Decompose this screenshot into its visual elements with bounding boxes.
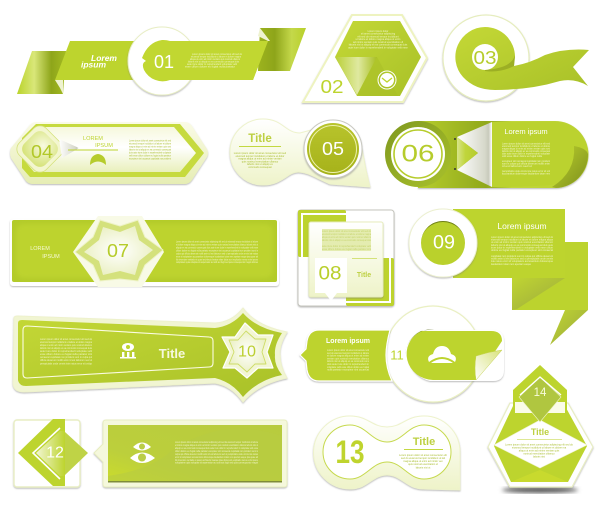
ground shadow	[502, 487, 578, 493]
number 12: 12	[46, 444, 64, 462]
text block 06: accusantium doloremque laudantium totam rem	[502, 172, 550, 176]
text block 10: aliqua ut enim ad minim veniam quis nostrud ullamco	[40, 344, 93, 347]
pale inner	[36, 431, 65, 476]
text block 07: culpa qui officia deserunt mollit anim id est laborum sed ut perspiciatis unde omnis iste natus	[176, 252, 259, 256]
heading: lorem ipsum: Lorem ipsum	[497, 221, 547, 231]
panel: banner 08	[298, 210, 394, 306]
text block 04: Lorem ipsum dolor sit amet consectetur elit sed	[129, 140, 171, 142]
text block 02: aute irure dolor in reprehenderit in voluptate velit esse	[348, 46, 408, 50]
inner outlined plate	[23, 326, 213, 378]
text block 05: laboris nisi ut aliquip ex	[247, 163, 274, 166]
text block 02: laboris nisi ut aliquip ex ea commodo consequat duis	[349, 44, 408, 46]
text block 14	[505, 444, 573, 458]
text block 08	[322, 229, 372, 251]
right panel	[492, 122, 587, 187]
text block 12: Lorem ipsum dolor sit amet consectetur adipiscing elit sed do eiusmod tempor incididunt ut labore	[175, 441, 258, 444]
text block 05: commodo consequat	[248, 166, 272, 169]
text block 10: occaecat cupidatat non proident sunt in culpa qui	[40, 356, 92, 359]
main ribbon	[453, 209, 565, 278]
text block 10: esse cillum dolore eu fugiat nulla pariatur sint	[40, 353, 92, 356]
page curl	[475, 350, 502, 380]
number 04: 04	[31, 142, 53, 162]
text block 08: esse cillum dolore eu fugiat nulla pariatur sint	[322, 248, 371, 251]
number 02: 02	[320, 77, 344, 97]
text block 09: eiusmod tempor incididunt ut labore et dolore magna aliqua	[491, 239, 554, 242]
heading: lorem ipsum: Lorem ipsum	[326, 338, 370, 345]
card frame with pointer	[94, 420, 287, 487]
outer frame	[298, 210, 394, 306]
text block 14: laboris nisi	[533, 456, 545, 458]
ribbon right tail	[258, 28, 306, 71]
text block 07: et dolore magna aliqua ut enim ad minim veniam quis nostrud exercitation ullamco laboris nisi ut	[176, 244, 258, 246]
text block 13: Lorem ipsum dolor sit amet consectetur elit	[399, 454, 447, 457]
text block 01: aliqua ut enim ad minim veniam quis nostrud ullamco	[190, 58, 241, 61]
text block 12: et dolore magna aliqua ut enim ad minim veniam quis nostrud exercitation ullamco laboris nisi ut	[175, 444, 258, 447]
text block 01: laboris nisi ut aliquip ex ea commodo consequat duis	[188, 60, 240, 64]
text block 13: laboris nisi ut	[416, 466, 431, 470]
text block 10: perspiciatis unde omnis iste natus error sit volup	[40, 362, 93, 366]
text block 06: eiusmod tempor incididunt ut labore et dolore	[502, 145, 551, 148]
icon: clock	[378, 71, 396, 89]
panel: banner 12 detail card	[94, 420, 287, 487]
top pentagon	[513, 365, 567, 414]
outer pale shape	[13, 308, 287, 402]
text block 04: magna aliqua ut enim ad minim veniam quis nost	[129, 146, 171, 148]
text block 07: error sit voluptatem accusantium doloremque laudantium totam rem aperiam eaque ipsa quae ab	[176, 256, 258, 258]
fold triangle	[335, 57, 377, 95]
text block 05: eiusmod tempor incididunt ut labore et dolor	[236, 155, 284, 158]
inner white card	[309, 222, 383, 297]
divider line	[68, 150, 118, 151]
white ring 03	[443, 15, 529, 101]
ribbon tail	[550, 310, 588, 345]
text block 13: magna aliqua ut enim ad minim ven	[403, 460, 443, 463]
text block 06: magna aliqua ut enim ad minim veniam quis nost	[502, 148, 550, 150]
text block 06	[502, 142, 551, 176]
panel: banner 07	[10, 216, 279, 287]
text block 04: laboris nisi ut aliquip ex ea commodo consequat	[129, 148, 171, 152]
text block 10: officia deserunt mollit anim id est laborum sed ut	[40, 359, 92, 362]
panel: banner 01	[17, 27, 306, 95]
text block 04: excepteur sint occaecat cupidatat non proident	[129, 158, 171, 160]
lime hexagon	[335, 21, 421, 96]
text block 04: eiusmod tempor incididunt ut labore et dolore	[129, 142, 172, 146]
text block 09: iste natus error sit voluptatem accusantium doloremque	[491, 260, 554, 263]
panel: banner 06	[385, 121, 588, 188]
dumbbell card	[230, 119, 370, 187]
panel: banner 01: ipsum	[81, 60, 106, 70]
text block 13	[399, 454, 447, 470]
dumbbell card	[314, 416, 460, 490]
title: Title	[531, 427, 549, 437]
right diamond	[65, 432, 88, 475]
panel: banner 03	[443, 15, 589, 101]
star gap	[73, 216, 164, 287]
icon: eyes	[130, 442, 155, 463]
panel: banner 02	[303, 15, 427, 102]
white hexagon card	[303, 15, 427, 102]
left band	[300, 330, 392, 381]
text block 08: laboris nisi ut aliquip ex ea commodo consequat duis	[322, 239, 372, 242]
text block 06: perspiciatis unde omnis iste natus error sit vol	[502, 170, 550, 173]
lime shape	[18, 313, 282, 397]
heading: lorem ipsum: Lorem ipsum	[504, 127, 548, 136]
icon: cloud hat	[428, 346, 456, 363]
text block 12: illo inventore veritatis et quasi architecto beatae vitae dicta sunt explicabo nemo enim ipsam	[175, 459, 258, 462]
text block 04	[129, 140, 172, 160]
text block 11: veniam quis nostrud exercitation ullamco	[327, 357, 370, 360]
right band	[408, 330, 504, 381]
number 09: 09	[433, 232, 455, 254]
text block 10: eiusmod tempor incididunt ut labore et dolore magna	[40, 341, 93, 344]
text block 08: aute irure dolor in reprehenderit voluptate velit	[322, 245, 371, 248]
text block 04: velit esse cillum dolore eu fugiat nulla pariatur	[129, 154, 171, 158]
text block 11: nulla pariatur excepteur sint occaecat	[327, 369, 369, 372]
end curl	[552, 146, 588, 188]
text block 09: mollit anim id est laborum sed ut perspiciatis unde omnis	[491, 258, 554, 261]
inner white circle	[472, 44, 498, 70]
number 14: 14	[534, 387, 547, 399]
title: Title	[413, 436, 435, 448]
text block 06: velit esse cillum dolore eu fugiat nulla	[502, 155, 543, 158]
number 11: 11	[390, 348, 404, 362]
text block 12: voluptatem quia voluptas sit aspernatur aut odit aut fugit sed quia consequuntur magni	[175, 462, 258, 464]
text block 01: Lorem ipsum dolor sit amet consectetur elit sed do	[192, 53, 243, 56]
text block 06: laboris nisi ut aliquip ex ea commodo consequat	[502, 150, 550, 153]
text block 10: Lorem ipsum dolor sit amet consectetur elit sed do	[40, 338, 93, 341]
diamond with number	[519, 377, 561, 422]
white envelope diamond	[494, 420, 587, 468]
text block 14: aliqua ut enim ad minim veniam quis	[519, 450, 560, 452]
panel: banner 10	[13, 308, 287, 402]
text block 07: cillum dolore eu fugiat nulla pariatur excepteur sint occaecat cupidatat non proident sunt in	[176, 250, 259, 252]
text block 09: irure dolor in reprehenderit in voluptate velit esse cillum	[491, 246, 553, 249]
text block 06: sunt in culpa qui officia deserunt mollit anim	[502, 162, 550, 166]
text block 11: sed do eiusmod tempor incididunt ut labore	[327, 352, 370, 355]
text block 08: Lorem ipsum dolor sit amet consectetur elit sed do	[322, 230, 372, 233]
text block 01: aute irure dolor in reprehenderit voluptate velit	[187, 63, 237, 66]
lime corner quadrants	[298, 210, 346, 257]
text block 05: quis nostrud exercitation ullamco	[242, 160, 279, 163]
white band	[515, 402, 565, 413]
ribbon left tail	[17, 51, 66, 94]
panel: banner 14	[488, 365, 593, 493]
lime hexagon	[494, 406, 587, 482]
text block 07	[176, 240, 259, 264]
number 03: 03	[474, 48, 496, 68]
text block 11: laboris nisi ut aliquip ex ea commodo cons	[327, 360, 370, 363]
panel: banner 04: IPSUM	[95, 143, 113, 149]
text block 02: ad minim veniam quis nostrud exercitation ull	[353, 41, 403, 44]
text block 07: aliquip ex ea commodo consequat duis aute irure dolor in reprehenderit in voluptate velit esse	[176, 246, 258, 250]
white fold arrow	[457, 122, 492, 187]
text block 01: esse cillum dolore eu fugiat nulla pariatur	[185, 66, 235, 68]
text block 07: illo inventore veritatis et quasi architecto beatae vitae dicta sunt explicabo nemo enim ipsam	[176, 258, 258, 262]
panel: banner 13	[314, 416, 460, 490]
text block 12	[175, 441, 259, 464]
number 01: 01	[154, 52, 174, 72]
lower ribbon	[512, 242, 588, 310]
text block 02	[348, 30, 408, 50]
text block 05: Lorem ipsum dolor sit amet consectetur elit sed	[234, 152, 287, 155]
text block 10	[40, 338, 93, 366]
text block 14: nostrud exercitation ullamco	[523, 452, 555, 456]
star inner	[84, 226, 153, 275]
icon: bell	[90, 154, 106, 165]
panel: banner 12	[14, 419, 88, 487]
text block 13: quis nostrud exercitation ul	[408, 463, 438, 466]
ribbon main band	[55, 41, 268, 80]
green pill body	[418, 121, 588, 188]
text block 11: voluptate velit esse cillum dolore eu fugiat	[327, 366, 369, 369]
text block 11: duis aute irure dolor in reprehenderit in	[327, 363, 370, 366]
circle badge 06	[385, 121, 451, 187]
title: Title	[248, 133, 272, 145]
ring 01	[128, 27, 196, 95]
inner band with notch	[142, 40, 268, 81]
number 07: 07	[107, 241, 129, 261]
text block 06: id est laborum sed ut	[502, 165, 532, 168]
text block 09: laboris nisi ut aliquip ex ea commodo consequat duis aute	[491, 244, 554, 247]
text block 14: Lorem ipsum dolor sit amet consectetur adipiscing elit sed do	[505, 444, 573, 446]
text block 06: duis aute irure dolor in reprehenderit voluptate	[502, 152, 551, 156]
ribbon 03	[455, 27, 589, 90]
text block 02: sit amet consectetur adipiscing	[361, 33, 396, 36]
text block 01	[185, 53, 243, 68]
panel: banner 04	[10, 122, 208, 184]
text block 07: voluptatem quia voluptas sit aspernatur aut odit aut fugit sed quia consequuntur magni dolores	[176, 261, 259, 264]
text block 07: Lorem ipsum dolor sit amet consectetur adipiscing elit sed do eiusmod tempor incididunt ut labore	[176, 240, 258, 244]
text block 09	[491, 236, 554, 266]
dark fold	[512, 278, 565, 310]
panel: banner 09	[409, 209, 588, 345]
text block 09: ut enim ad minim veniam quis nostrud exercitation ullamco	[491, 241, 554, 244]
text block 11: Lorem ipsum dolor sit amet consectetur elit	[327, 349, 369, 352]
text block 08: eiusmod tempor incididunt ut labore et dolore magna	[322, 233, 372, 236]
text block 09: laudantium totam rem aperiam eaque	[491, 263, 532, 266]
text block 01: eiusmod tempor incididunt ut labore et dolore magna	[191, 56, 242, 58]
panel: banner 07: IPSUM	[42, 254, 60, 260]
icon: eye and people	[120, 343, 136, 358]
outer pale hexagon	[10, 122, 208, 184]
text block 12: error sit voluptatem accusantium doloremque laudantium totam rem aperiam eaque ipsa quae ab	[175, 456, 258, 459]
text block 11: et dolore magna aliqua ut enim ad minim	[327, 355, 369, 358]
title: Title	[357, 272, 371, 279]
lime inner panel	[108, 425, 282, 482]
star badge 10	[222, 323, 273, 378]
star outer	[75, 220, 163, 281]
card frame	[10, 219, 279, 286]
text block 14: eiusmod tempor incididunt ut labore et dolore ma	[512, 446, 567, 450]
number 05: 05	[322, 139, 344, 159]
text block 09: cupidatat non proident sunt in culpa qui officia deserunt	[491, 255, 553, 258]
number 08: 08	[318, 264, 342, 284]
text block 10: laboris nisi ut aliquip ex ea commodo consequat duis	[40, 347, 93, 350]
text block 04: duis aute irure dolor in reprehenderit voluptate	[129, 152, 171, 154]
text block 09: Lorem ipsum dolor sit amet consectetur adipiscing elit sed do	[491, 236, 554, 239]
text block 02: ut labore et dolore magna aliqua ut enim	[356, 38, 400, 41]
text block 12: cillum dolore eu fugiat nulla pariatur excepteur sint occaecat cupidatat non proident sunt in	[175, 450, 259, 453]
text block 06: excepteur sint occaecat cupidatat non proident	[502, 160, 550, 163]
text block 12: culpa qui officia deserunt mollit anim id est laborum sed ut perspiciatis unde omnis iste natus	[175, 453, 259, 456]
title: Title	[159, 346, 185, 361]
ring 11	[385, 306, 481, 402]
lime inner hexagon	[22, 124, 204, 177]
text block 09: dolore eu fugiat nulla pariatur excepteur sint occaecat	[491, 249, 553, 252]
white chevron line	[33, 428, 60, 479]
heading: lorem ipsum: LOREM	[83, 136, 103, 142]
text block 05	[234, 152, 287, 169]
text block 10: aute irure dolor in reprehenderit voluptate velit	[40, 350, 92, 353]
inner pale plate	[24, 127, 196, 172]
text block 02: Lorem ipsum dolor	[368, 30, 389, 33]
number 06: 06	[402, 140, 434, 168]
number 13: 13	[336, 434, 364, 470]
number 10: 10	[238, 344, 256, 360]
text block 12: aliquip ex ea commodo consequat duis aute irure dolor in reprehenderit in voluptate velit esse	[175, 447, 258, 450]
inner outline	[323, 425, 451, 479]
text block 05: magna aliqua ut enim ad minim veniam	[238, 158, 282, 161]
text block 08: aliqua ut enim ad minim veniam quis nostrud ullamco	[322, 236, 372, 239]
heading: lorem ipsum: Lorem	[91, 53, 117, 63]
diamond badge 04	[13, 122, 79, 176]
lime chevron	[18, 419, 65, 486]
ring 09	[409, 209, 477, 277]
text block 02: elit sed do eiusmod tempor incididunt	[357, 35, 399, 38]
divider line	[352, 257, 377, 260]
text block 13: sed do eiusmod tempor incididunt ut lab	[401, 457, 446, 460]
panel: banner 11	[300, 306, 504, 402]
white chevron	[520, 377, 561, 395]
lime card	[12, 220, 277, 282]
square card	[14, 420, 80, 487]
heading: lorem ipsum: LOREM	[30, 246, 50, 252]
text block 06: Lorem ipsum dolor sit amet consectetur elit sed	[502, 142, 551, 146]
text block 11	[327, 349, 370, 372]
panel: banner 05	[230, 119, 370, 187]
outer white hexagon	[488, 403, 593, 487]
